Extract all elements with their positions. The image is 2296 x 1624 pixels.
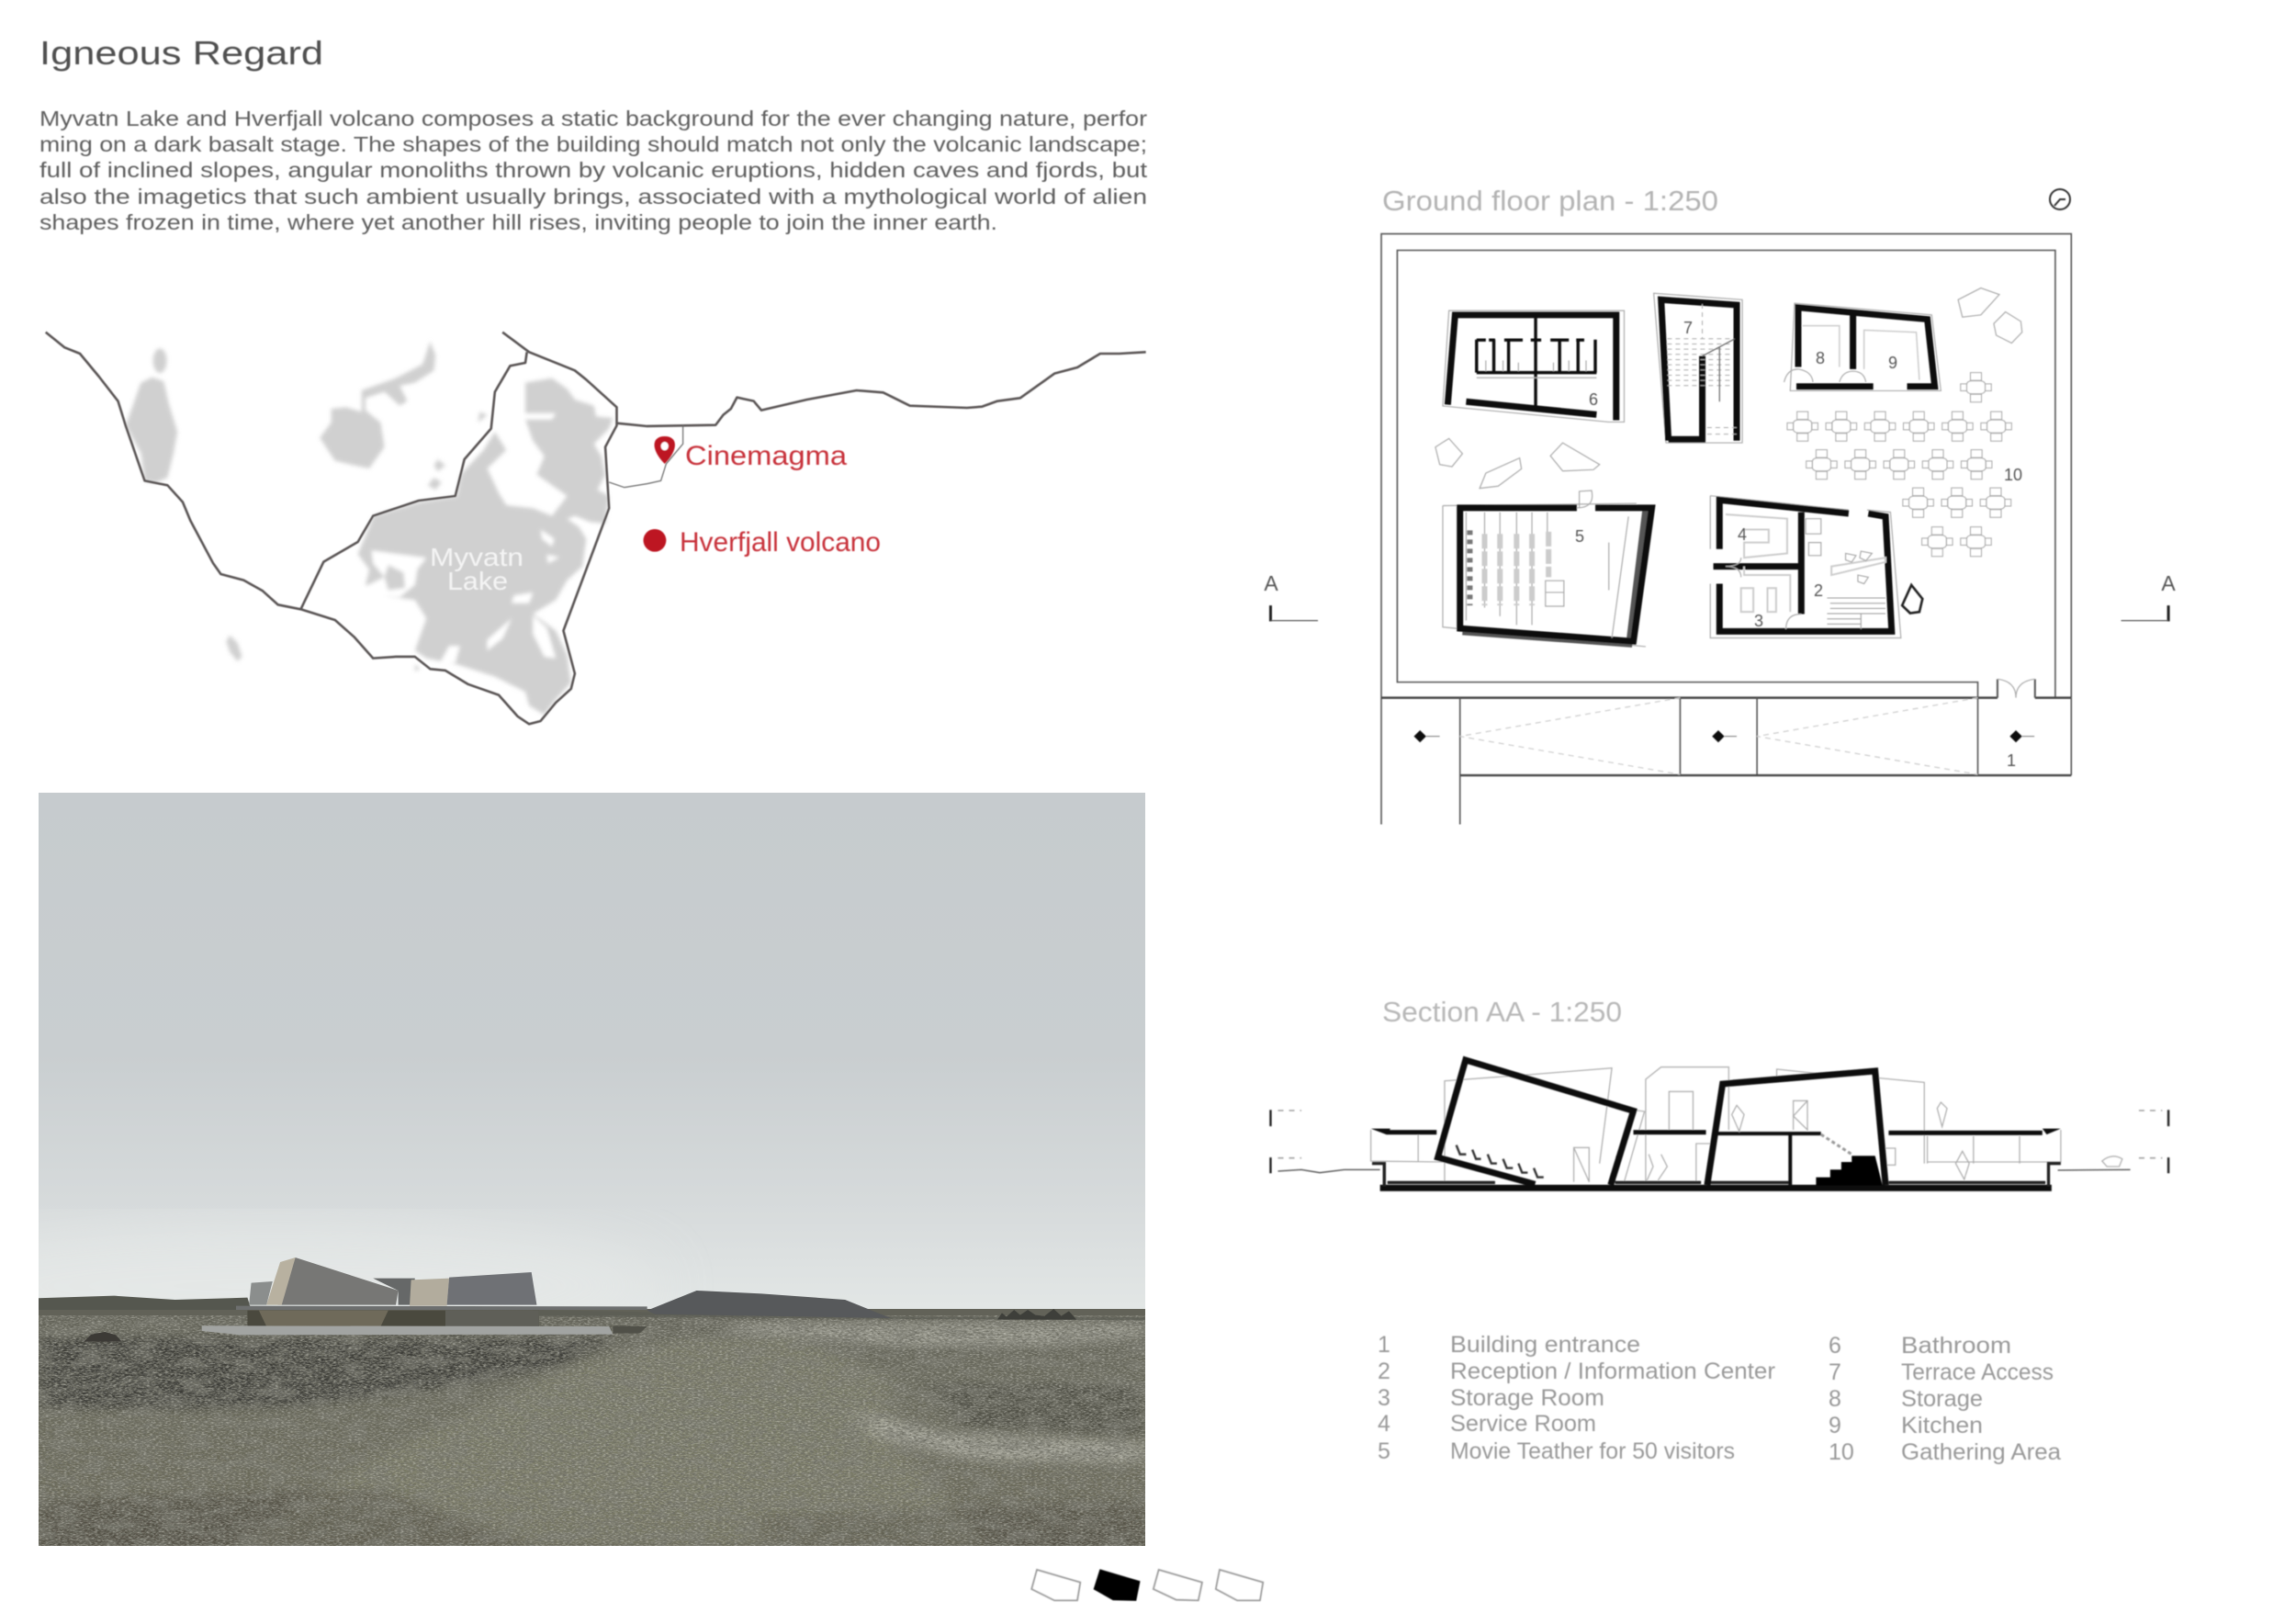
section heading: Section AA - 1:250 (1382, 996, 1622, 1028)
legend column 2: Storage (1901, 1386, 1983, 1412)
roads (46, 333, 1146, 724)
icon: pin centre (661, 442, 669, 450)
reception volume (1707, 1071, 1885, 1185)
page indicator icons (1031, 1570, 1263, 1600)
plan heading: Ground floor plan - 1:250 (1382, 185, 1718, 217)
lake label: Myvatn (430, 543, 523, 571)
legend column 2: 6 (1829, 1333, 1841, 1359)
room 6 bathroom (1443, 310, 1624, 422)
legend column 2: Terrace Access (1901, 1359, 2054, 1385)
far shore (539, 1315, 1145, 1321)
rocks (1435, 288, 2022, 614)
grass highlights (39, 1315, 1145, 1546)
legend column 2: Gathering Area (1901, 1439, 2061, 1465)
lava fields and lake (126, 342, 613, 715)
rocks (997, 1309, 1076, 1320)
room numbers: 4 (1738, 525, 1747, 544)
people (1647, 1102, 2122, 1180)
legend column 1: Building entrance (1450, 1332, 1640, 1358)
room numbers: 5 (1575, 527, 1584, 546)
tilted cinema volume (1438, 1060, 1634, 1185)
legend column 1: 2 (1378, 1359, 1390, 1384)
legend column 2: Bathroom (1901, 1333, 2011, 1359)
label: Cinemagma: Cinemagma (685, 441, 847, 471)
legend: room list (1378, 1332, 2061, 1465)
room 7 terrace access (1654, 293, 1742, 443)
ground patches (38, 1323, 1145, 1546)
ground (39, 1309, 1145, 1546)
landscape and building (38, 1257, 1145, 1342)
icon: volcano dot (644, 529, 666, 552)
lake label (430, 543, 523, 595)
legend column 2: 10 (1829, 1439, 1854, 1465)
hill (647, 1291, 891, 1318)
section structure (1380, 1185, 2052, 1191)
lake islands (366, 413, 559, 663)
room numbers: 6 (1589, 390, 1598, 409)
legend column 1: Movie Teather for 50 visitors (1450, 1438, 1735, 1464)
section drawing (1270, 1060, 2168, 1188)
rooms 8 and 9 (1784, 303, 1941, 390)
ground line (1278, 1169, 2131, 1173)
legend column 2: 9 (1829, 1413, 1841, 1438)
background volumes (1371, 1067, 2061, 1182)
site outline (1381, 234, 2071, 824)
legend column 2: 8 (1829, 1386, 1841, 1412)
treeline (38, 1296, 252, 1310)
room numbers: 9 (1888, 354, 1897, 372)
boulder (84, 1332, 122, 1342)
panel: location map (46, 333, 1146, 724)
section letters (1264, 571, 2176, 595)
access road (609, 425, 683, 488)
legend column 2: Kitchen (1901, 1413, 1983, 1438)
legend column 1 (1378, 1332, 1775, 1464)
section letters: A (1264, 571, 1278, 595)
room numbers: 1 (2007, 751, 2016, 770)
plan drawing (1270, 234, 2168, 824)
building (202, 1257, 647, 1335)
section letters: A (2161, 571, 2176, 595)
section marks (1270, 1110, 2168, 1173)
legend column 1: 4 (1378, 1411, 1390, 1437)
room numbers: 3 (1754, 612, 1763, 630)
sky (39, 793, 1145, 1316)
dark grass blotches (39, 1315, 1145, 1546)
room numbers: 7 (1683, 319, 1693, 337)
panel: section AA (1270, 996, 2168, 1188)
legend column 2: 7 (1829, 1359, 1841, 1385)
dining tables (1787, 373, 2011, 557)
legend column 1: 1 (1378, 1332, 1390, 1358)
legend column 1: Storage Room (1450, 1385, 1604, 1411)
intro paragraph: also the imagetics that such ambient usually brings, associated with a mythological world of alien (39, 185, 1147, 209)
icon: north compass (2050, 189, 2070, 209)
legend column 2 (1829, 1333, 2061, 1465)
rooms 2 3 4 (1710, 496, 1901, 637)
map lakes and roads (46, 333, 1146, 724)
photo: building render in landscape (0, 793, 1145, 1546)
legend column 1: 5 (1378, 1438, 1390, 1464)
grass texture (39, 1315, 1145, 1546)
intro paragraph: ming on a dark basalt stage. The shapes of the building should match not only the volcanic landscape; (39, 132, 1147, 156)
legend column 1: 3 (1378, 1385, 1390, 1411)
parking markers (1413, 730, 2022, 742)
intro paragraph (39, 107, 1148, 234)
intro paragraph: full of inclined slopes, angular monoliths thrown by volcanic eruptions, hidden caves and fjords, but (39, 158, 1148, 182)
room numbers: 2 (1814, 581, 1823, 600)
room 5 cinema (1443, 491, 1652, 647)
section marks (1270, 605, 2168, 622)
legend column 1: Service Room (1450, 1411, 1596, 1437)
icon: location pin (655, 436, 675, 464)
lake label: Lake (447, 567, 508, 595)
sky tone (0, 1222, 661, 1350)
room numbers: 10 (2004, 466, 2022, 484)
room numbers (1575, 319, 2022, 770)
intro paragraph: shapes frozen in time, where yet another hill rises, inviting people to join the inner earth. (39, 210, 997, 234)
tilted seats (1457, 1145, 1544, 1178)
panel: ground floor plan (1264, 185, 2176, 824)
title: Igneous Regard (39, 34, 323, 72)
room numbers: 8 (1816, 349, 1825, 367)
intro paragraph: Myvatn Lake and Hverfjall volcano composes a static background for the ever changing nature, perfor (39, 107, 1147, 130)
label: Hverfjall volcano: Hverfjall volcano (680, 527, 881, 558)
legend column 1: Reception / Information Center (1450, 1359, 1775, 1384)
